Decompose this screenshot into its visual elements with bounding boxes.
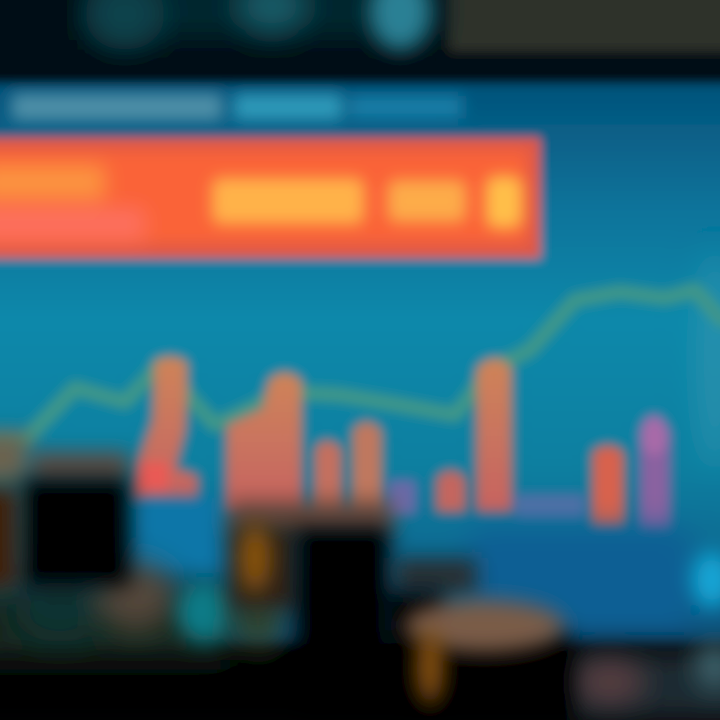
panel: orange banner — [0, 138, 540, 258]
text block: blurred banner figure — [212, 176, 522, 228]
text block: blurred banner caption — [0, 165, 145, 240]
coin stack: front right — [404, 600, 570, 720]
coin stack: centre — [228, 500, 477, 720]
heading: illegible blurred header bars — [12, 94, 462, 120]
lower screen blue area — [136, 498, 720, 630]
line chart: green trend line — [0, 290, 720, 440]
top backdrop — [0, 0, 720, 90]
coin stack: left — [0, 432, 130, 590]
bar chart: salmon and purple bars — [134, 356, 670, 528]
foreground dark floor — [0, 562, 720, 720]
panel: blue screen — [0, 84, 720, 644]
